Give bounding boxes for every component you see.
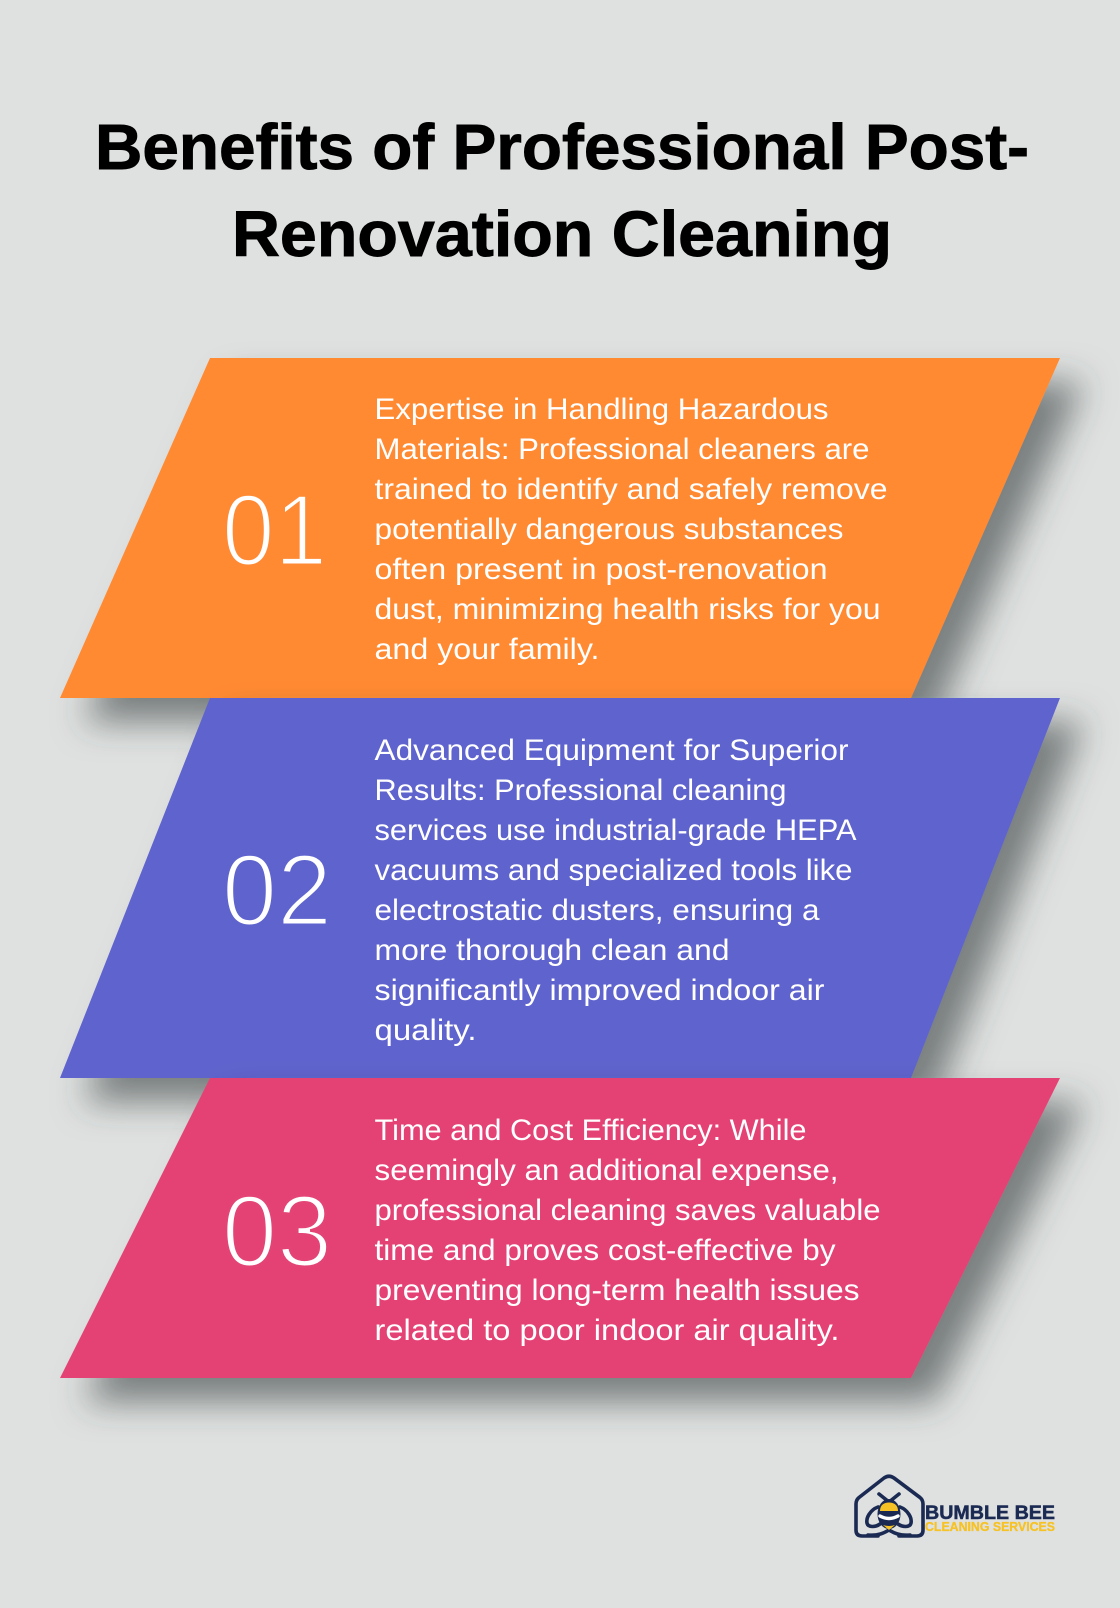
title: Renovation Cleaning xyxy=(232,198,892,270)
text: efficiency: Time and Cost Efficiency: While xyxy=(374,1114,806,1147)
title xyxy=(95,111,1029,270)
panel: 01 hazardous materials xyxy=(60,358,1060,698)
text: efficiency: preventing long-term health issues xyxy=(374,1274,860,1307)
panel: 03 time and cost xyxy=(60,1078,1060,1378)
tagline: CLEANING SERVICES xyxy=(925,1520,1055,1534)
text: efficiency: professional cleaning saves valuable xyxy=(374,1194,880,1227)
text: efficiency xyxy=(374,1114,880,1347)
logo: Bumble Bee xyxy=(856,1476,1055,1536)
text: equipment: significantly improved indoor air xyxy=(374,974,825,1007)
icon: house with bee xyxy=(856,1476,923,1536)
text: equipment: more thorough clean and xyxy=(374,934,730,967)
blue parallelogram xyxy=(60,698,1060,1078)
text: equipment: Advanced Equipment for Superior xyxy=(374,734,849,767)
text: expertise xyxy=(374,393,888,666)
text: expertise: Materials: Professional cleaners are xyxy=(374,433,870,466)
text: equipment: electrostatic dusters, ensuring a xyxy=(374,894,820,927)
text: equipment: services use industrial-grade HEPA xyxy=(374,814,857,847)
number 02: 02 xyxy=(222,835,332,947)
panel: 02 advanced equipment xyxy=(60,698,1060,1078)
text: efficiency: seemingly an additional expense, xyxy=(374,1154,838,1187)
text: efficiency: time and proves cost-effective by xyxy=(374,1234,836,1267)
pink parallelogram xyxy=(60,1078,1060,1378)
text: expertise: potentially dangerous substances xyxy=(374,513,844,546)
number 01: 01 xyxy=(222,475,327,587)
text: efficiency: related to poor indoor air quality. xyxy=(374,1314,840,1347)
text: expertise: often present in post-renovation xyxy=(374,553,828,586)
text: expertise: Expertise in Handling Hazardous xyxy=(374,393,828,426)
text: equipment: vacuums and specialized tools like xyxy=(374,854,852,887)
text: expertise: and your family. xyxy=(374,633,600,666)
text: equipment: Results: Professional cleaning xyxy=(374,774,786,807)
title: Benefits of Professional Post- xyxy=(95,111,1029,183)
text: expertise: dust, minimizing health risks for you xyxy=(374,593,880,626)
text: equipment: quality. xyxy=(374,1014,476,1047)
orange parallelogram xyxy=(60,358,1060,698)
number 03: 03 xyxy=(222,1176,332,1288)
text: expertise: trained to identify and safely remove xyxy=(374,473,888,506)
text: equipment xyxy=(374,734,857,1047)
wordmark: BUMBLE BEE xyxy=(925,1502,1055,1524)
